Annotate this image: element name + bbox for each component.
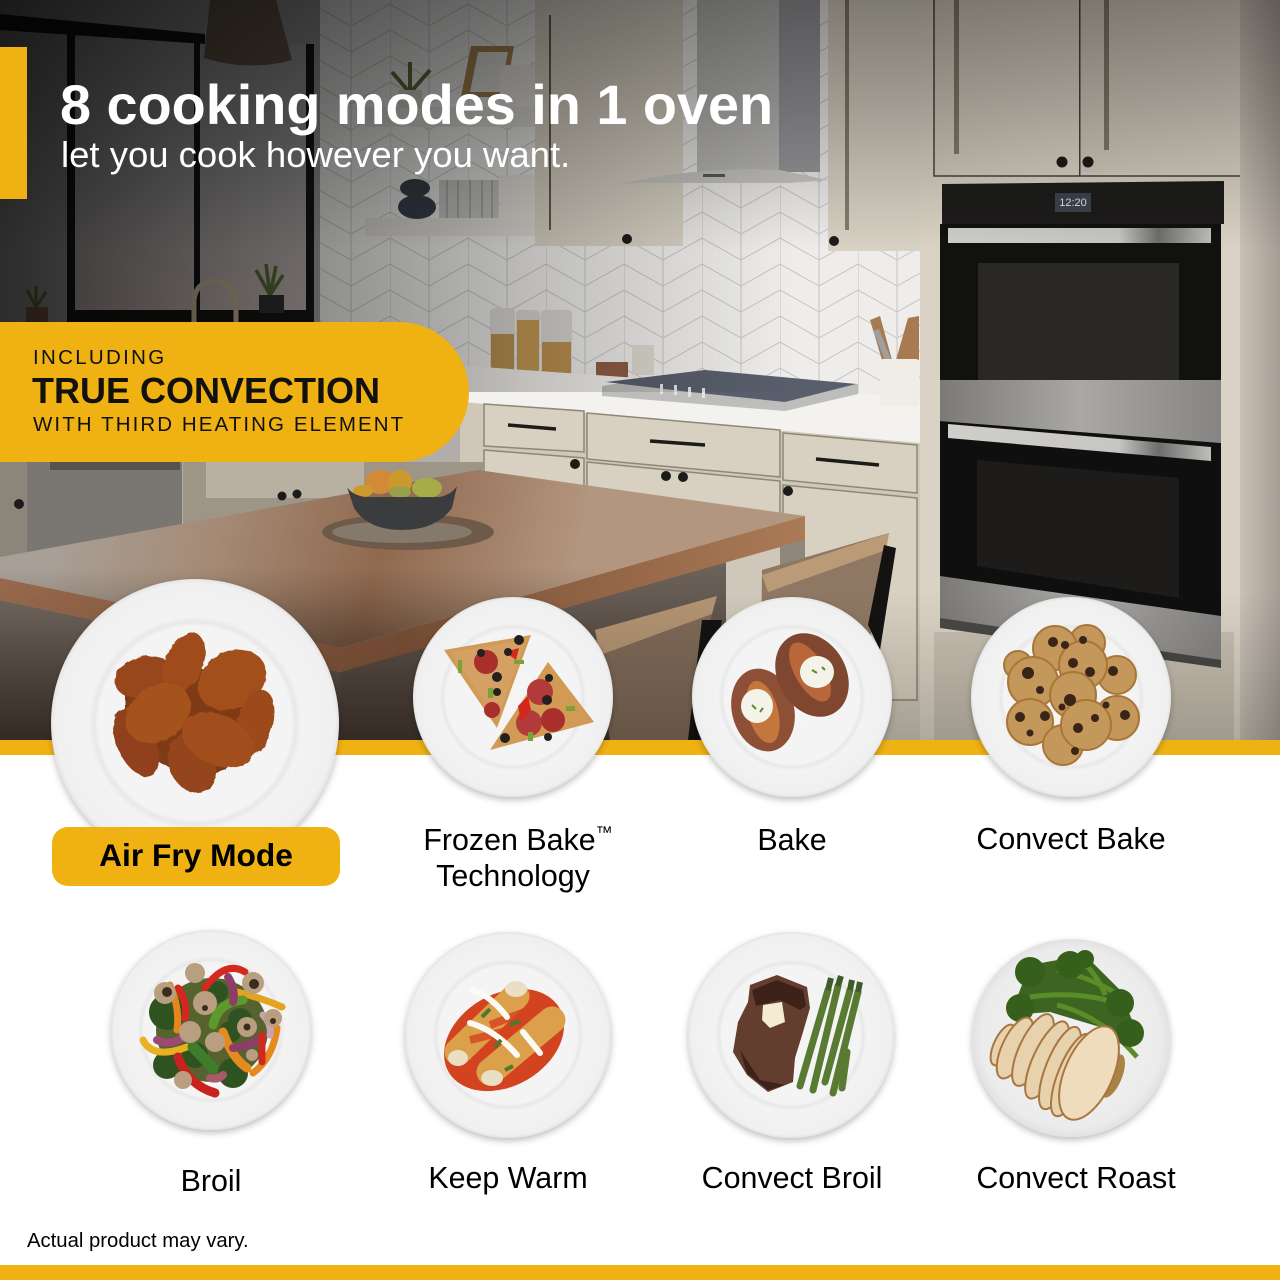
label: convect bake: Convect Bake [976,822,1166,856]
disclaimer: Actual product may vary. [27,1230,249,1252]
window plants and faucet [26,264,284,323]
badge: true convection [0,322,469,462]
label: convect roast: Convect Roast [976,1161,1176,1195]
shelves and dishes [365,46,537,236]
plate: air fry [51,579,339,867]
window [0,0,320,325]
label: frozen bake technology: Frozen Bake™ [423,823,613,857]
range hood [620,0,828,184]
chairs [595,533,896,740]
badge line 3: WITH THIRD HEATING ELEMENT [33,413,405,436]
upper cabinet left [535,0,683,246]
label: convect broil: Convect Broil [702,1161,882,1195]
plate: broil [111,930,311,1130]
plate: convect bake [971,597,1171,797]
far left cabinets and dishwasher [0,462,483,562]
subtitle: let you cook however you want. [61,134,570,175]
fruit bowl [322,470,494,550]
label: frozen bake technology: Technology [436,859,590,893]
photo shading [0,0,1280,740]
island [0,470,805,740]
label: keep warm: Keep Warm [428,1161,588,1195]
title: 8 cooking modes in 1 oven [60,73,773,136]
plate: convect broil [688,932,894,1138]
plate: keep warm [405,932,611,1138]
tall cabinets [920,0,1280,740]
label: air fry mode: Air Fry Mode [99,837,293,873]
utensil holder [870,316,919,406]
double wall oven: 12:20 [1059,197,1087,209]
yellow title tab [0,47,27,199]
badge line 1: INCLUDING [33,346,166,369]
label: broil: Broil [181,1164,241,1198]
upper cabinet right [828,0,922,251]
badge line 2: TRUE CONVECTION [32,370,380,411]
plate: frozen bake [413,597,613,797]
label: frozen bake technology [423,823,613,893]
cooktop [602,370,858,411]
jars [490,308,654,381]
label: air fry mode [52,827,340,886]
plate: bake [692,597,892,797]
lower cabinets and counter [440,364,920,740]
pendant lamp [204,0,292,66]
backsplash [300,0,930,400]
kitchen background photo [0,0,1280,740]
label: bake: Bake [757,823,827,857]
yellow accent band [0,740,1280,755]
bottom yellow bar [0,1265,1280,1280]
plate: convect roast [972,939,1170,1137]
double wall oven [940,181,1224,668]
